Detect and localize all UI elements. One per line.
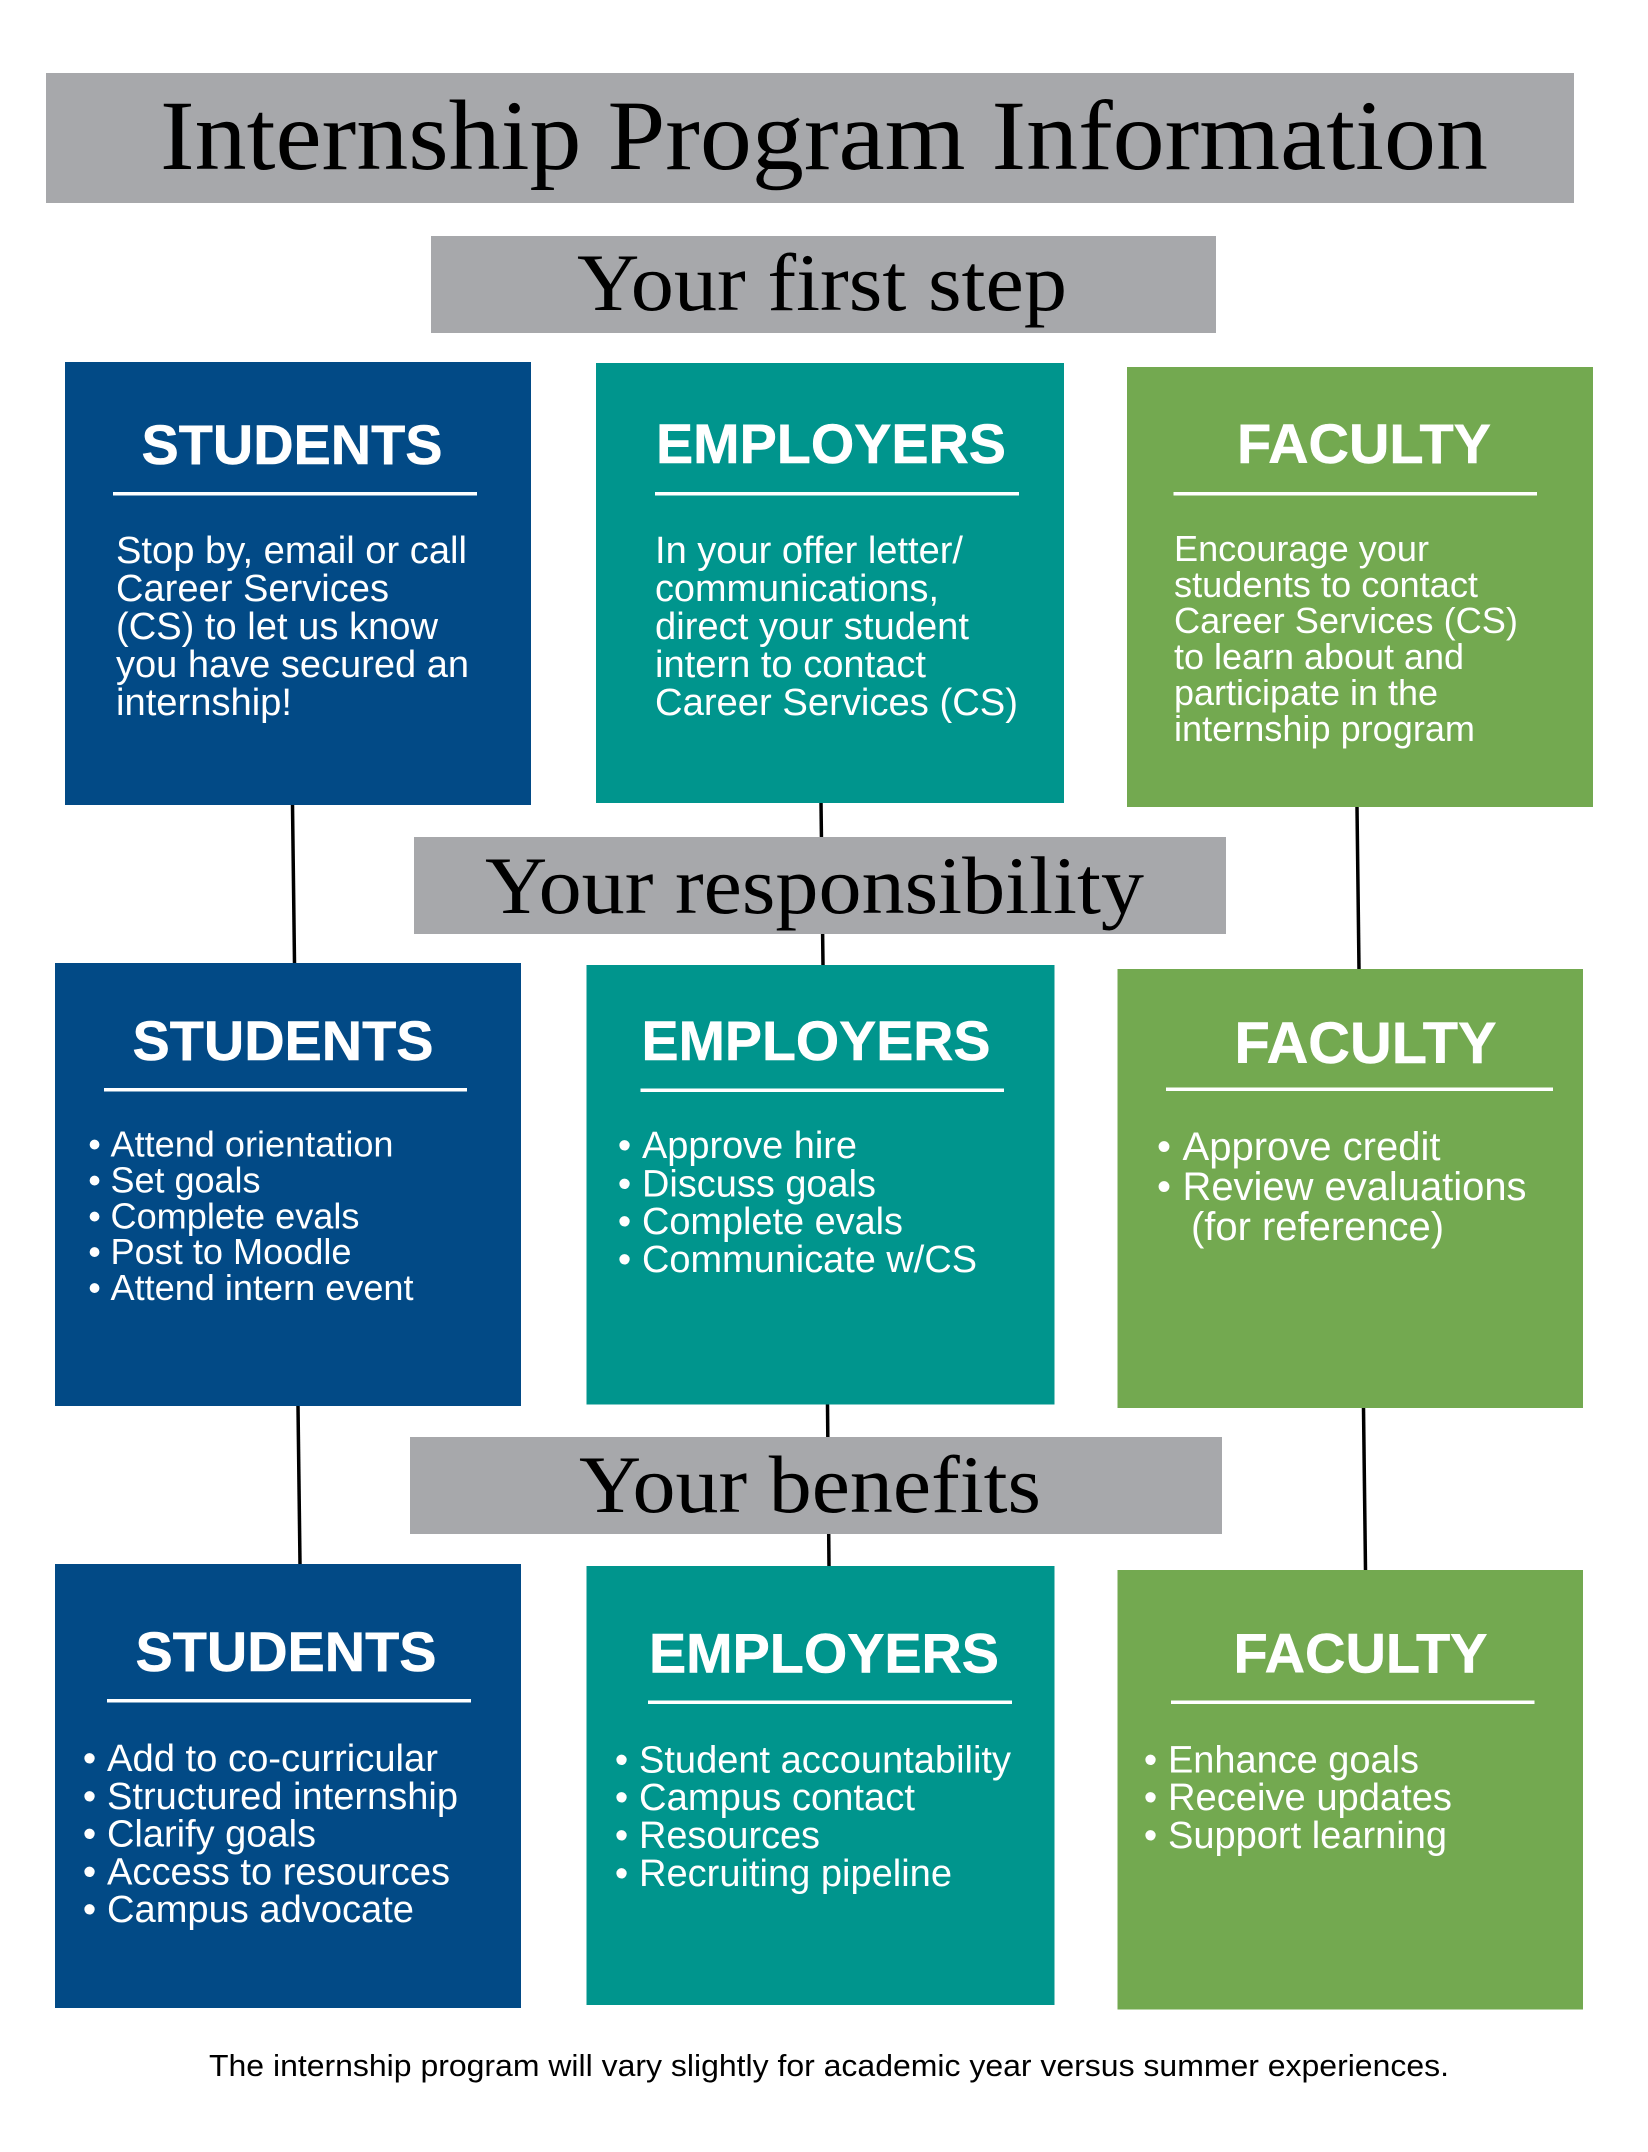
panel: students responsibility: Attend orientation bbox=[110, 1124, 394, 1164]
panel: students benefits: STUDENTS bbox=[136, 1620, 436, 1683]
panel: faculty benefits: FACULTY bbox=[1234, 1622, 1488, 1684]
panel: employers responsibility: EMPLOYERS bbox=[642, 1009, 990, 1072]
heading: your first step: Your first step bbox=[577, 237, 1067, 328]
panel: students responsibility: Attend intern event bbox=[110, 1267, 414, 1308]
panel: employers benefits: Student accountability bbox=[639, 1740, 1011, 1782]
panel: employers benefits bbox=[586, 1566, 1054, 2005]
panel: students benefits: Clarify goals bbox=[107, 1814, 316, 1856]
panel: employers first step: EMPLOYERS bbox=[656, 412, 1006, 475]
panel: students benefits: Structured internship bbox=[107, 1776, 458, 1818]
panel: faculty benefits: • bbox=[1144, 1740, 1157, 1782]
footer note: The internship program will vary slightly for academic year versus summer experiences. bbox=[209, 2048, 1449, 2083]
panel: employers benefits: • bbox=[615, 1853, 628, 1895]
panel: employers benefits: • bbox=[615, 1815, 628, 1857]
panel: employers responsibility: Communicate w/CS bbox=[642, 1239, 977, 1281]
panel: students responsibility: Set goals bbox=[110, 1160, 260, 1200]
heading: your responsibility: Your responsibility bbox=[485, 840, 1144, 931]
panel: students benefits: • bbox=[83, 1738, 96, 1780]
panel: students benefits: • bbox=[83, 1889, 96, 1931]
panel: employers responsibility: Complete evals bbox=[642, 1201, 903, 1243]
panel: students first step bbox=[65, 362, 531, 805]
panel: faculty responsibility: • bbox=[1157, 1165, 1171, 1209]
panel: faculty responsibility: Review evaluations bbox=[1182, 1165, 1526, 1209]
panel: faculty first step bbox=[1127, 367, 1593, 807]
panel: faculty first step: students to contact bbox=[1174, 564, 1478, 605]
panel: employers responsibility: • bbox=[618, 1201, 631, 1243]
title banner: Internship Program Information bbox=[160, 80, 1488, 191]
panel: students benefits: • bbox=[83, 1852, 96, 1894]
panel: employers first step: direct your student bbox=[655, 606, 969, 648]
panel: students benefits: • bbox=[83, 1814, 96, 1856]
panel: students responsibility: • bbox=[88, 1196, 101, 1236]
panel: employers responsibility bbox=[586, 965, 1054, 1404]
panel: students responsibility: Complete evals bbox=[110, 1196, 360, 1236]
panel: faculty first step: participate in the bbox=[1174, 672, 1438, 713]
panel: faculty first step: to learn about and bbox=[1174, 636, 1464, 677]
panel: employers first step: communications, bbox=[655, 568, 939, 610]
panel: students first step: Career Services bbox=[116, 568, 389, 610]
panel: faculty first step: Career Services (CS) bbox=[1174, 600, 1518, 641]
panel: students responsibility: • bbox=[88, 1160, 101, 1200]
connector lines bbox=[292, 802, 1366, 1570]
heading: your benefits: Your benefits bbox=[579, 1439, 1041, 1530]
panel: students benefits: Campus advocate bbox=[107, 1889, 414, 1931]
panel: employers first step bbox=[596, 363, 1064, 803]
panel: faculty first step: internship program bbox=[1174, 708, 1475, 749]
panel: employers benefits: Resources bbox=[639, 1815, 820, 1857]
heading: your first step bbox=[431, 236, 1216, 333]
panel: faculty responsibility: Approve credit bbox=[1182, 1125, 1440, 1169]
panel: faculty benefits: • bbox=[1144, 1777, 1157, 1819]
panel: faculty benefits: Enhance goals bbox=[1168, 1740, 1419, 1782]
panel: students benefits: Add to co-curricular bbox=[107, 1738, 438, 1780]
panel: faculty benefits: Receive updates bbox=[1168, 1777, 1452, 1819]
panel: students responsibility bbox=[55, 963, 521, 1406]
panel: faculty benefits: Support learning bbox=[1168, 1815, 1447, 1857]
panel: employers responsibility: Approve hire bbox=[642, 1125, 857, 1167]
panel: employers responsibility: • bbox=[618, 1125, 631, 1167]
panel: students first step: STUDENTS bbox=[142, 413, 442, 476]
panel: students responsibility: • bbox=[88, 1124, 101, 1164]
panel: employers benefits: Recruiting pipeline bbox=[639, 1853, 952, 1895]
panel: faculty responsibility: FACULTY bbox=[1234, 1011, 1496, 1076]
panel: employers first step: Career Services (CS) bbox=[655, 682, 1018, 724]
panel: faculty responsibility bbox=[1118, 969, 1583, 1408]
panel: students first step: (CS) to let us know bbox=[116, 606, 439, 648]
panel: students benefits: Access to resources bbox=[107, 1852, 450, 1894]
panel: students first step: Stop by, email or call bbox=[116, 530, 467, 572]
panel: students responsibility: STUDENTS bbox=[132, 1009, 434, 1072]
panel: employers benefits: • bbox=[615, 1740, 628, 1782]
panel: students responsibility: • bbox=[88, 1267, 101, 1308]
panel: employers responsibility: Discuss goals bbox=[642, 1164, 876, 1206]
panel: faculty benefits bbox=[1118, 1570, 1583, 2010]
heading: your benefits bbox=[410, 1437, 1222, 1534]
panel: faculty first step: Encourage your bbox=[1174, 528, 1429, 569]
panel: employers responsibility: • bbox=[618, 1239, 631, 1281]
panel: students responsibility: Post to Moodle bbox=[110, 1231, 352, 1272]
panel: faculty benefits: • bbox=[1144, 1815, 1157, 1857]
panel: employers benefits: • bbox=[615, 1777, 628, 1819]
panel: students benefits bbox=[55, 1564, 521, 2008]
panel: students responsibility: • bbox=[88, 1231, 101, 1272]
panel: faculty responsibility: (for reference) bbox=[1191, 1205, 1444, 1249]
panel: faculty first step: FACULTY bbox=[1237, 412, 1491, 475]
panel: faculty responsibility: • bbox=[1157, 1125, 1171, 1169]
panel: employers responsibility: • bbox=[618, 1164, 631, 1206]
panel: students benefits: • bbox=[83, 1776, 96, 1818]
panel: employers first step: intern to contact bbox=[655, 644, 926, 686]
panel: students first step: internship! bbox=[116, 682, 292, 724]
panel: employers benefits: Campus contact bbox=[639, 1777, 915, 1819]
panel: students first step: you have secured an bbox=[116, 644, 469, 686]
panel: employers first step: In your offer letter/ bbox=[655, 530, 963, 572]
panel: employers benefits: EMPLOYERS bbox=[649, 1622, 999, 1684]
